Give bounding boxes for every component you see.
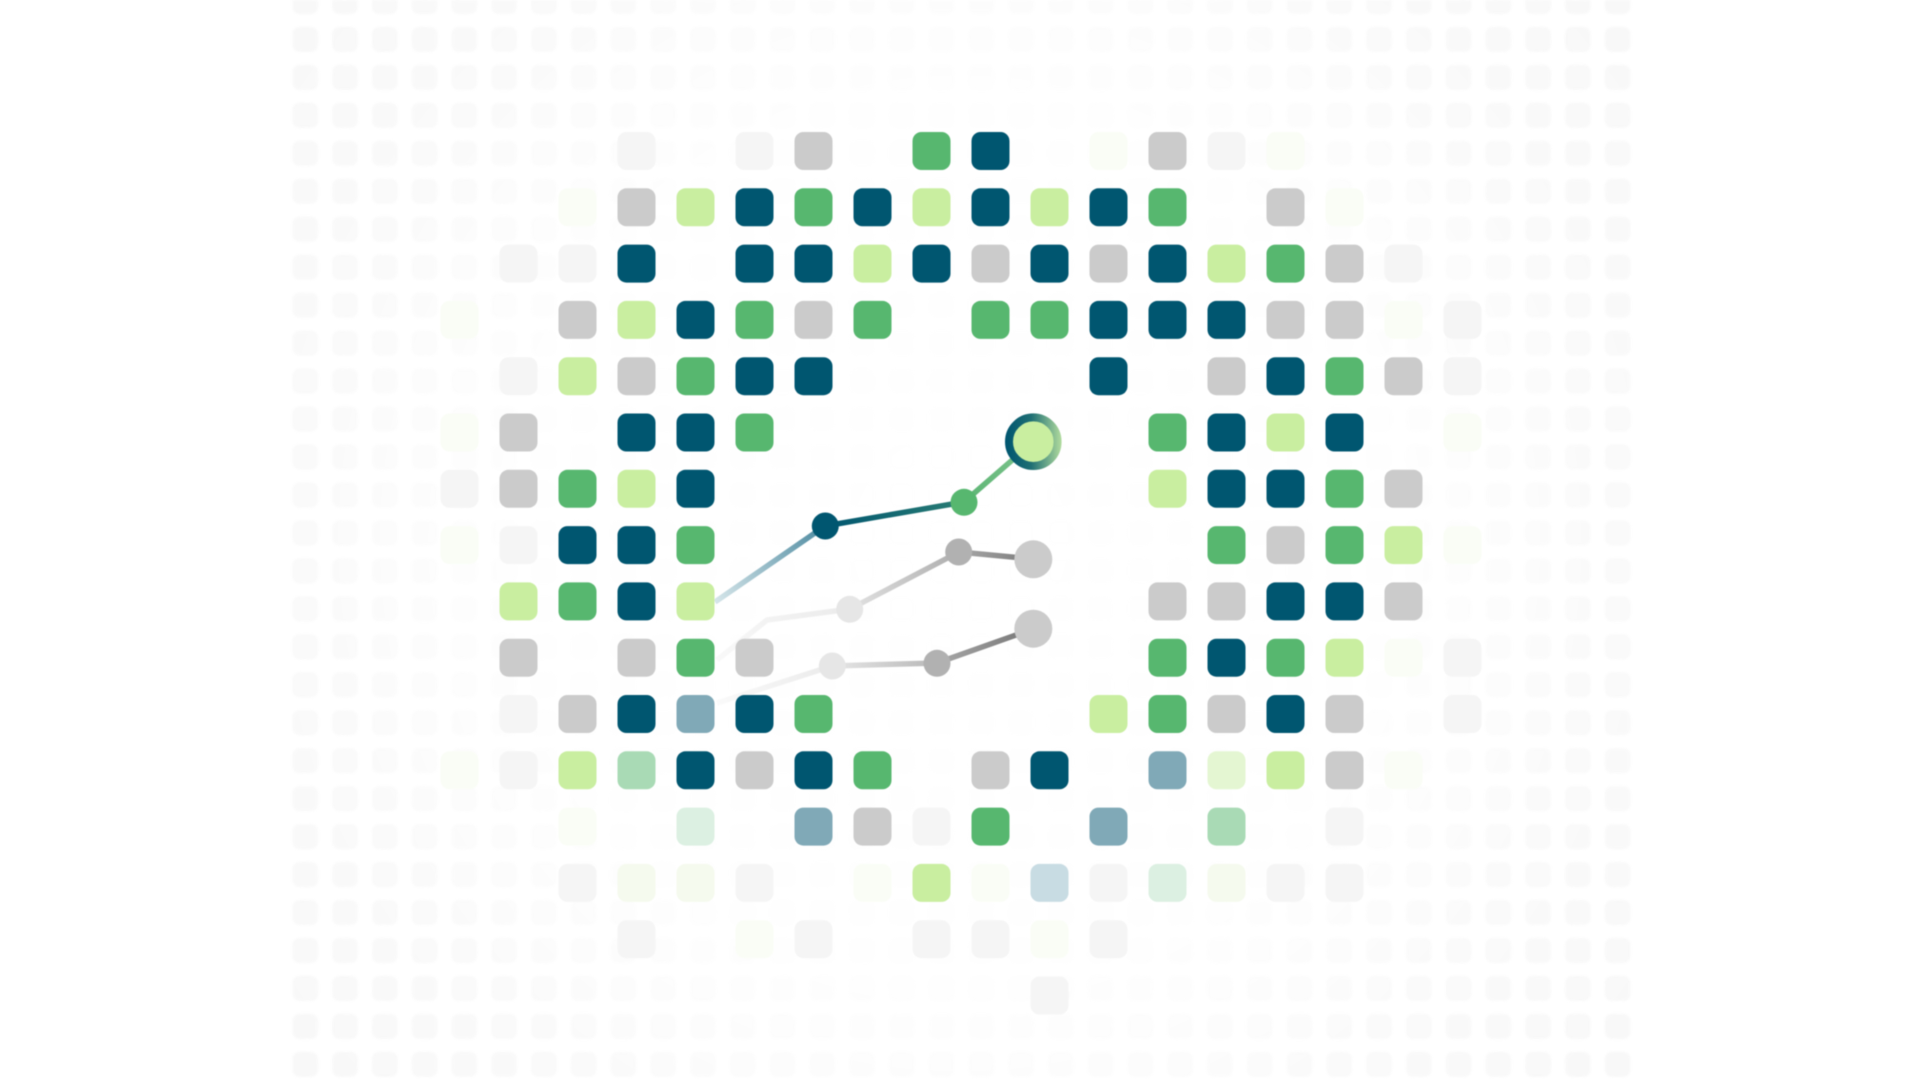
background dot grid bbox=[292, 0, 1631, 1081]
tile row 2 bbox=[558, 188, 1364, 226]
nodes: top series bbox=[812, 417, 1058, 540]
tile row 13 bbox=[558, 808, 1364, 846]
tile row 5 bbox=[500, 357, 1482, 395]
tile row 4 bbox=[440, 301, 1482, 339]
tile row 16 bbox=[1030, 976, 1068, 1014]
tile grid bbox=[440, 132, 1482, 1014]
tile row 7 bbox=[440, 470, 1422, 508]
tile row 10 bbox=[500, 639, 1482, 677]
tile row 12 bbox=[440, 751, 1422, 789]
tile row 15 bbox=[618, 920, 1128, 958]
tile row 11 bbox=[500, 695, 1482, 733]
tile row 9 bbox=[500, 582, 1422, 620]
tile row 3 bbox=[500, 245, 1422, 283]
tile row 1 bbox=[618, 132, 1304, 170]
line: top highlighted series bbox=[715, 442, 1033, 602]
tile row 14 bbox=[558, 864, 1364, 902]
line chart: three rising lines bbox=[715, 417, 1058, 703]
tile row 8 bbox=[440, 526, 1482, 564]
line: lower grey series bbox=[717, 629, 1033, 703]
line: middle grey series bbox=[717, 552, 1033, 660]
tile row 6 bbox=[440, 414, 1482, 452]
nodes: lower series bbox=[819, 610, 1052, 680]
nodes: middle series bbox=[836, 538, 1052, 623]
